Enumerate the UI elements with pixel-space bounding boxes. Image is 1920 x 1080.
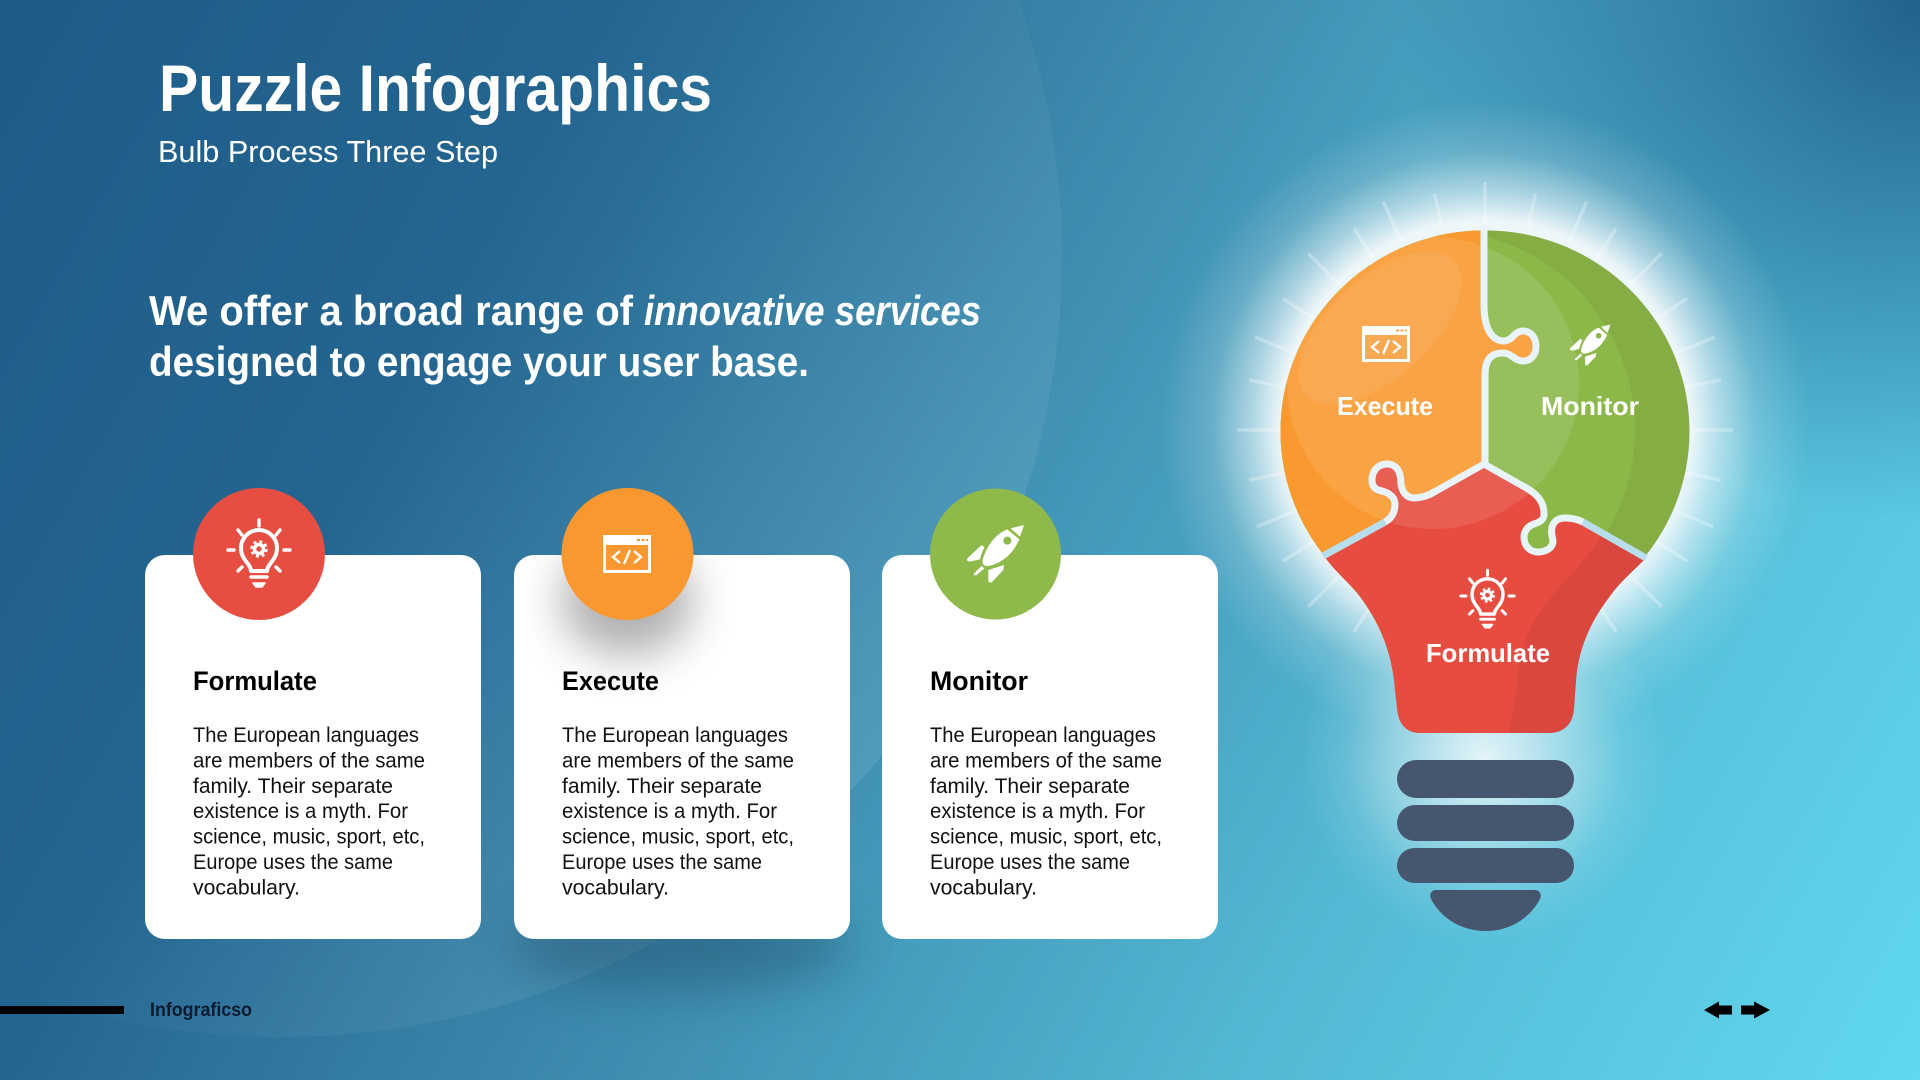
- card body: execute: [562, 724, 794, 900]
- card body: monitor: vocabulary.: [930, 876, 1037, 900]
- card heading: execute: Execute: [562, 666, 659, 696]
- card body: execute: Europe uses the same: [562, 851, 762, 874]
- icon badge: execute: [562, 488, 694, 620]
- card heading: formulate: Formulate: [193, 666, 317, 696]
- puzzle icon: rocket: [1570, 325, 1610, 365]
- navigation arrows: [1704, 1002, 1770, 1018]
- card body: monitor: science, music, sport, etc,: [930, 826, 1162, 848]
- puzzle label: execute: Execute: [1337, 391, 1433, 421]
- puzzle piece: formulate: [1326, 468, 1644, 733]
- card body: formulate: Europe uses the same: [193, 851, 393, 874]
- subtitle: Bulb Process Three Step: [158, 134, 498, 169]
- card body: formulate: science, music, sport, etc,: [193, 826, 425, 848]
- card body: monitor: Europe uses the same: [930, 851, 1130, 874]
- puzzle icon: code window: [1362, 326, 1410, 360]
- card body: execute: are members of the same: [562, 750, 794, 772]
- circle shadow: [561, 544, 693, 656]
- card body: formulate: are members of the same: [193, 750, 425, 772]
- title: Puzzle Infographics: [159, 51, 712, 125]
- puzzle piece: execute: [1280, 230, 1532, 552]
- puzzle label: monitor: Monitor: [1541, 391, 1639, 421]
- main statement: innovative services: [644, 287, 981, 334]
- card body: monitor: [930, 724, 1162, 900]
- puzzle seams: [1323, 226, 1646, 558]
- card shadow: [510, 899, 850, 991]
- glow rays: [1237, 182, 1733, 632]
- card body: monitor: are members of the same: [930, 750, 1162, 772]
- bulb glow: [1160, 100, 1810, 945]
- icon badge: formulate: [193, 488, 325, 620]
- icon: code window: [603, 535, 651, 572]
- card body: execute: science, music, sport, etc,: [562, 826, 794, 848]
- card body: execute: The European languages: [562, 724, 788, 747]
- main statement: [149, 287, 981, 385]
- puzzle icon: idea bulb: [1461, 570, 1514, 628]
- card: execute: [514, 544, 850, 939]
- card body: formulate: vocabulary.: [193, 876, 300, 900]
- icon badge: monitor: [930, 488, 1061, 620]
- puzzle piece: monitor: [1280, 230, 1690, 733]
- main statement: We offer a broad range of: [149, 287, 634, 334]
- card: formulate: [145, 555, 481, 939]
- footer brand: Infograficso: [150, 1000, 252, 1021]
- card heading: monitor: Monitor: [930, 666, 1028, 696]
- icon: rocket: [967, 525, 1024, 583]
- highlights: [1272, 224, 1579, 529]
- puzzle label: formulate: Formulate: [1426, 638, 1550, 668]
- card body: execute: vocabulary.: [562, 876, 669, 900]
- card body: monitor: family. Their separate: [930, 775, 1130, 798]
- puzzle bulb: [1280, 230, 1690, 733]
- card: monitor: [882, 555, 1218, 939]
- bulb base: [1397, 760, 1574, 931]
- card body: formulate: existence is a myth. For: [193, 800, 408, 823]
- main statement: designed to engage your user base.: [149, 338, 809, 385]
- card body: formulate: [193, 724, 425, 900]
- card body: monitor: The European languages: [930, 724, 1156, 747]
- card body: execute: existence is a myth. For: [562, 800, 777, 823]
- card body: formulate: family. Their separate: [193, 775, 393, 798]
- icon: idea bulb: [228, 520, 290, 587]
- card body: formulate: The European languages: [193, 724, 419, 747]
- footer bar: [0, 1006, 124, 1014]
- card body: monitor: existence is a myth. For: [930, 800, 1145, 823]
- card body: execute: family. Their separate: [562, 775, 762, 798]
